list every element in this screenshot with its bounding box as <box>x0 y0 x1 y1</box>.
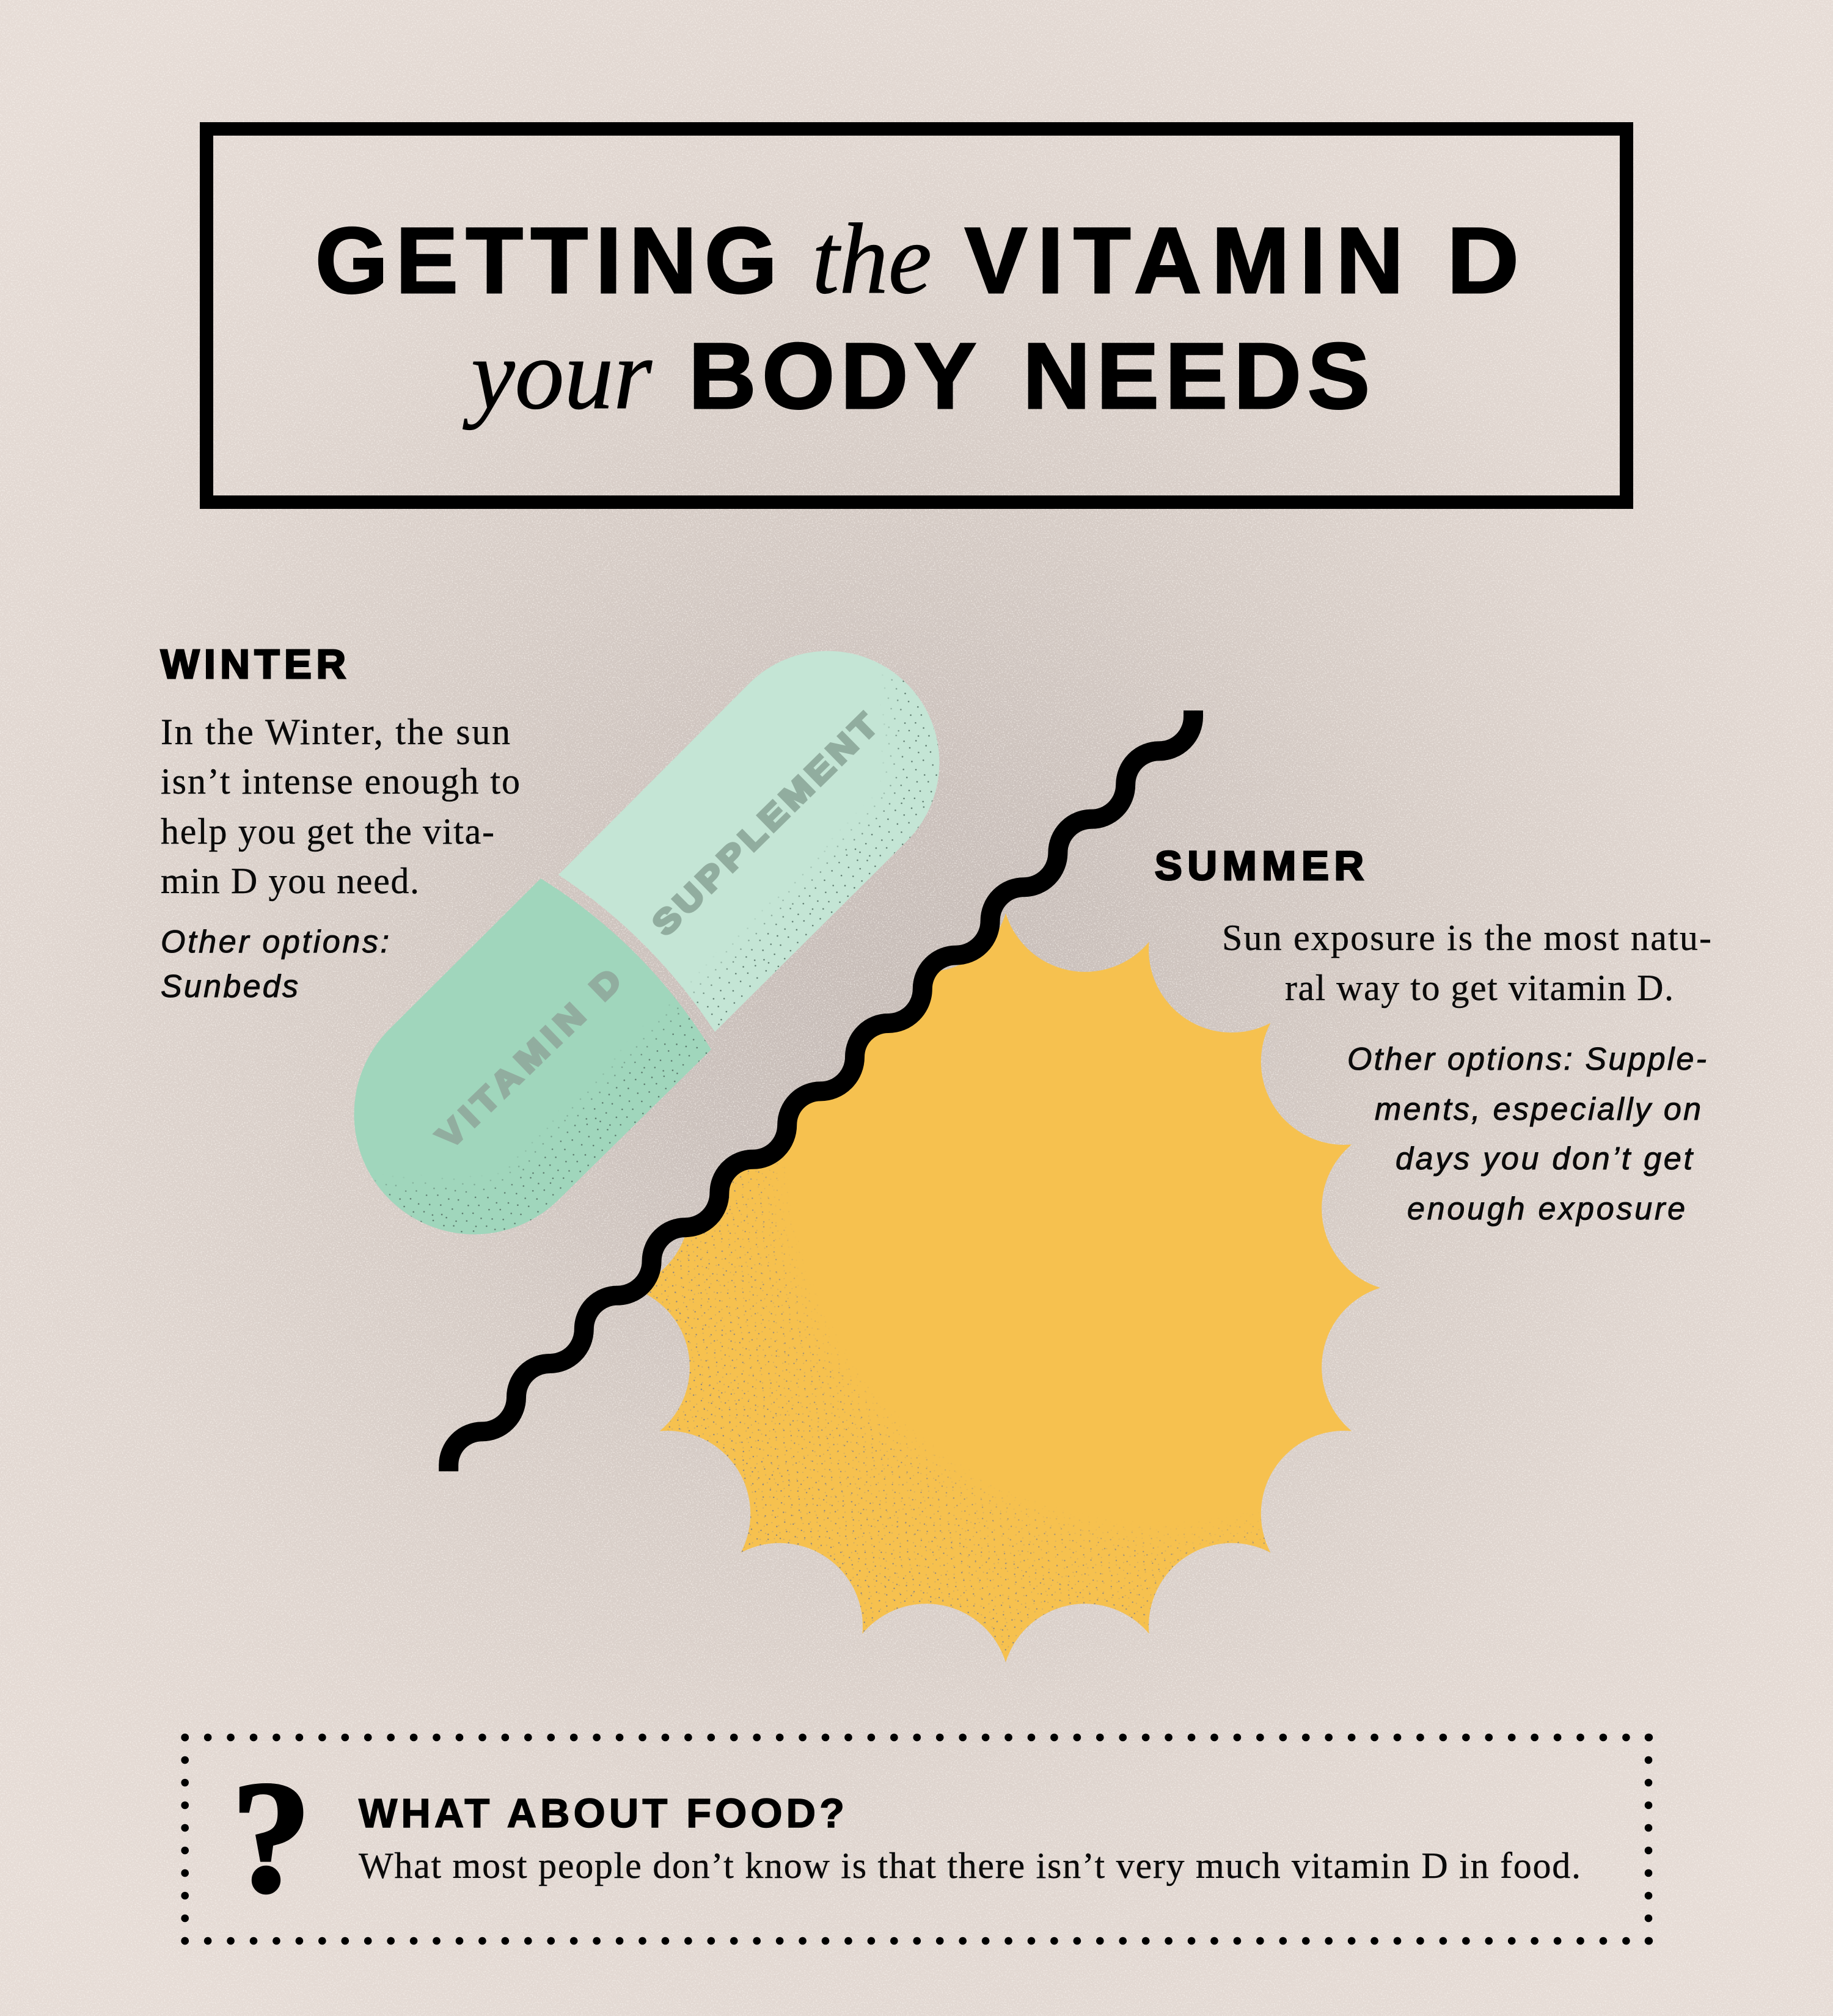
title text: the <box>812 203 932 315</box>
winter body: help you get the vita- <box>161 811 494 852</box>
summer body <box>1222 918 1711 1008</box>
sun illustration <box>631 913 1380 1662</box>
title text: D <box>1447 208 1519 313</box>
summer body: Sun exposure is the most natu- <box>1222 918 1711 958</box>
icon: question mark: ? <box>231 1748 312 1926</box>
title text <box>315 203 1519 430</box>
winter text block <box>161 641 520 1004</box>
winter body: min D you need. <box>161 861 419 901</box>
summer other options: days you don’t get <box>1396 1141 1694 1177</box>
title panel <box>207 129 1626 502</box>
summer other options: Other options: Supple- <box>1347 1042 1707 1077</box>
summer other options: enough exposure <box>1407 1191 1685 1227</box>
pill illustration <box>354 651 939 1234</box>
summer text block <box>1155 843 1711 1227</box>
winter other options: Other options: <box>161 924 389 960</box>
food callout panel <box>185 1737 1651 1943</box>
title text: your <box>463 318 653 430</box>
callout heading: WHAT ABOUT FOOD? <box>359 1791 844 1836</box>
title text: VITAMIN <box>965 208 1403 313</box>
winter body: In the Winter, the sun <box>161 712 510 752</box>
title frame <box>207 129 1626 502</box>
pill half: vitamin D: VITAMIN D <box>430 962 628 1155</box>
winter heading: WINTER <box>161 641 346 687</box>
pill half: supplement <box>558 651 939 1032</box>
title text: GETTING <box>315 208 777 313</box>
summer other options: ments, especially on <box>1375 1092 1701 1127</box>
winter body <box>161 712 520 901</box>
winter other options <box>161 924 389 1004</box>
summer heading: SUMMER <box>1155 843 1364 889</box>
winter other options: Sunbeds <box>161 969 298 1004</box>
summer other options <box>1347 1042 1707 1227</box>
summer body: ral way to get vitamin D. <box>1285 968 1674 1008</box>
callout body: What most people don’t know is that there isn’t very much vitamin D in food. <box>359 1846 1581 1886</box>
pill half: supplement: SUPPLEMENT <box>645 707 885 943</box>
pill half: vitamin D <box>354 878 711 1234</box>
dotted border <box>185 1737 1651 1943</box>
title text: BODY <box>689 324 976 428</box>
title text: NEEDS <box>1023 324 1370 428</box>
wavy divider line <box>448 710 1193 1471</box>
winter body: isn’t intense enough to <box>161 761 520 802</box>
